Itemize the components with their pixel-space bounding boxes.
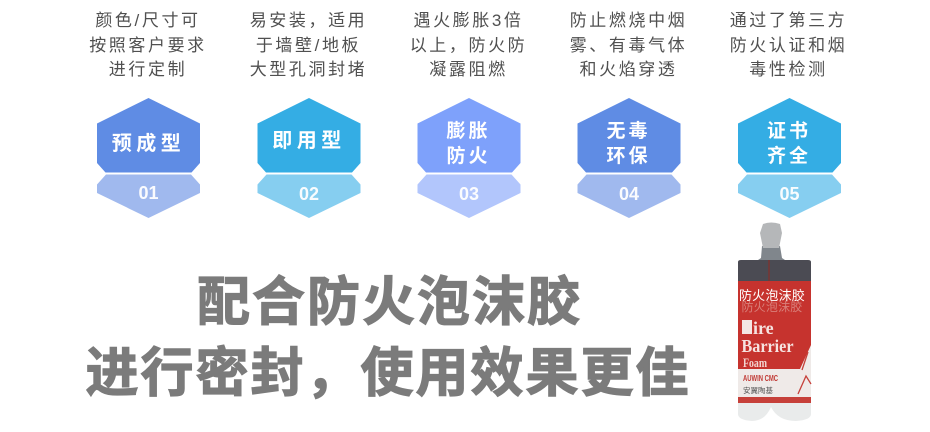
icon: fire barrier foam cartridge: Foam <box>743 355 767 370</box>
text: feature 3 description: 遇火膨胀3倍 <box>413 11 524 30</box>
text: feature 5 description: 毒性检测 <box>749 60 828 79</box>
text: feature 5 description: 防火认证和烟 <box>730 36 847 55</box>
cartridge translucent base <box>738 400 811 421</box>
text: feature 5 description <box>730 11 847 79</box>
icon: fire barrier foam cartridge: Barrier <box>742 336 794 356</box>
badge 05: 证书齐全 <box>738 98 841 218</box>
text: feature 2 description: 于墙壁/地板 <box>256 36 361 55</box>
text: feature 1 description: 按照客户要求 <box>89 36 207 55</box>
cartridge dark body <box>738 260 811 283</box>
badge 01: 预成型: 预成型 <box>112 131 185 155</box>
text: feature 2 description: 大型孔洞封堵 <box>250 60 367 79</box>
text: feature 1 description: 颜色/尺寸可 <box>95 11 201 30</box>
cartridge white band <box>738 345 811 398</box>
text: feature 1 description <box>89 11 207 79</box>
badge 03: 膨胀防火: 03 <box>459 184 479 204</box>
badge 05: 证书齐全: 05 <box>779 184 800 204</box>
text: feature 3 description <box>410 11 527 79</box>
badge 03: 膨胀防火: 防火 <box>446 144 491 167</box>
text: feature 1 description: 进行定制 <box>109 60 187 79</box>
icon: fire barrier foam cartridge: ire <box>753 318 774 338</box>
text: feature 4 description <box>570 11 687 79</box>
cartridge nozzle thread <box>758 246 785 260</box>
icon: fire barrier foam cartridge: 安翼陶基 <box>743 385 773 395</box>
badge 02: 即用型: 02 <box>299 184 319 204</box>
badge 04: 无毒环保: 无毒 <box>606 120 651 142</box>
badge 01: 预成型: 01 <box>138 183 159 203</box>
cartridge red strip <box>738 397 811 403</box>
cartridge red label <box>738 281 811 371</box>
cartridge label text: 防火泡沫胶 <box>739 288 805 303</box>
text: feature 5 description: 通过了第三方 <box>730 11 847 30</box>
text: feature 2 description <box>250 11 367 79</box>
badge 02: 即用型 <box>258 98 360 218</box>
badge 01: 预成型 <box>97 98 200 218</box>
badge 05: 证书齐全: 齐全 <box>767 144 811 167</box>
badge 04: 无毒环保: 04 <box>619 184 639 204</box>
badge 04: 无毒环保 <box>578 98 680 218</box>
text: feature 3 description: 以上，防火防 <box>410 36 527 55</box>
text: feature 4 description: 和火焰穿透 <box>580 60 678 79</box>
icon: fire barrier foam cartridge: AUWIN CMC <box>743 374 778 383</box>
headline: 进行密封，使用效果更佳 <box>86 344 690 403</box>
badge 02: 即用型: 即用型 <box>272 129 346 152</box>
text: feature 2 description: 易安装，适用 <box>250 11 367 30</box>
icon: fire barrier foam cartridge: 防火泡沫胶 <box>741 299 803 314</box>
text: feature 4 description: 防止燃烧中烟 <box>570 11 687 30</box>
cartridge red outline mark <box>798 352 811 394</box>
headline <box>86 273 690 403</box>
text: feature 3 description: 凝露阻燃 <box>429 60 508 79</box>
cartridge cap <box>760 222 782 248</box>
badge 04: 无毒环保: 环保 <box>606 145 651 167</box>
badge 03: 膨胀防火: 膨胀 <box>446 120 491 142</box>
text: feature 4 description: 雾、有毒气体 <box>570 36 687 55</box>
badge 05: 证书齐全: 证书 <box>767 120 811 142</box>
icon: fire barrier foam cartridge <box>738 222 811 421</box>
headline: 配合防火泡沫胶 <box>197 273 582 332</box>
badge 03: 膨胀防火 <box>418 98 520 218</box>
